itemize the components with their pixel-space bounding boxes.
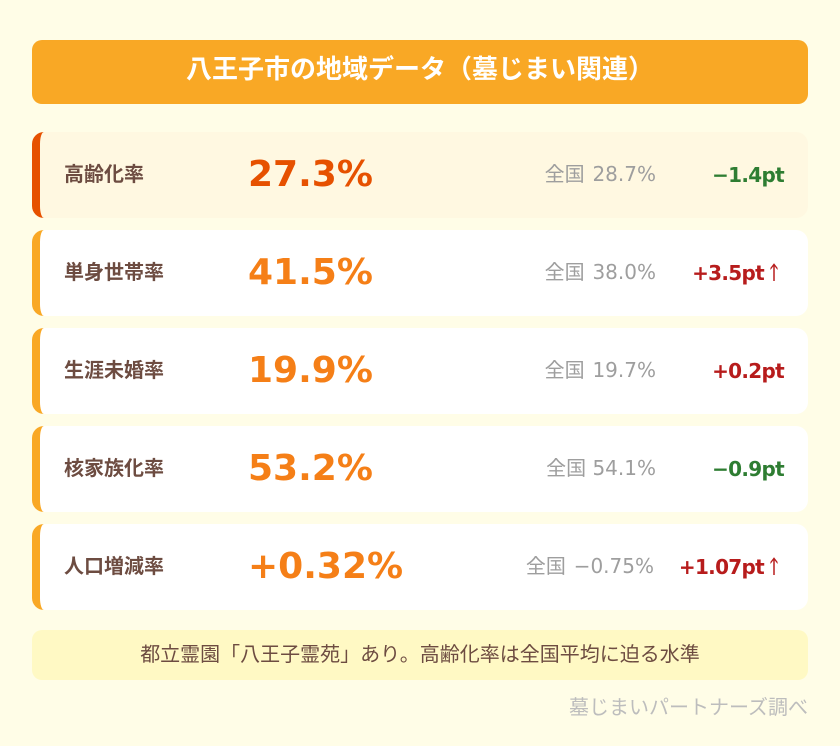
difference: −1.4pt <box>712 163 784 187</box>
label: 核家族化率 <box>64 456 164 480</box>
panel: 高齢化率 <box>32 132 808 218</box>
value: 19.9% <box>248 350 373 391</box>
callout note: 都立霊園「八王子霊苑」あり。高齢化率は全国平均に迫る水準 <box>140 642 700 666</box>
panel: 核家族化率 <box>32 426 808 512</box>
value: +0.32% <box>248 546 403 587</box>
national average: 全国 54.1% <box>546 456 656 480</box>
value: 41.5% <box>248 252 373 293</box>
title <box>32 40 808 104</box>
difference: +0.2pt <box>712 359 784 383</box>
national average: 全国 −0.75% <box>526 554 654 578</box>
difference: ↑ <box>764 557 784 577</box>
panel: 生涯未婚率 <box>32 328 808 414</box>
value: 53.2% <box>248 448 373 489</box>
label: 単身世帯率 <box>64 260 164 284</box>
panel: 人口増減率 <box>32 524 808 610</box>
difference: +1.07pt <box>679 555 764 579</box>
label: 高齢化率 <box>64 162 144 186</box>
panel: 単身世帯率 <box>32 230 808 316</box>
label: 生涯未婚率 <box>64 358 164 382</box>
national average: 全国 38.0% <box>545 260 656 284</box>
source credit: 墓じまいパートナーズ調べ <box>569 695 808 719</box>
difference: ↑ <box>764 263 784 283</box>
label: 人口増減率 <box>64 554 164 578</box>
national average: 全国 28.7% <box>545 162 656 186</box>
value: 27.3% <box>248 154 373 195</box>
title: 八王子市の地域データ（墓じまい関連） <box>186 55 654 85</box>
difference: +3.5pt <box>692 261 764 285</box>
national average: 全国 19.7% <box>545 358 656 382</box>
difference: −0.9pt <box>712 457 784 481</box>
callout note <box>32 630 808 680</box>
